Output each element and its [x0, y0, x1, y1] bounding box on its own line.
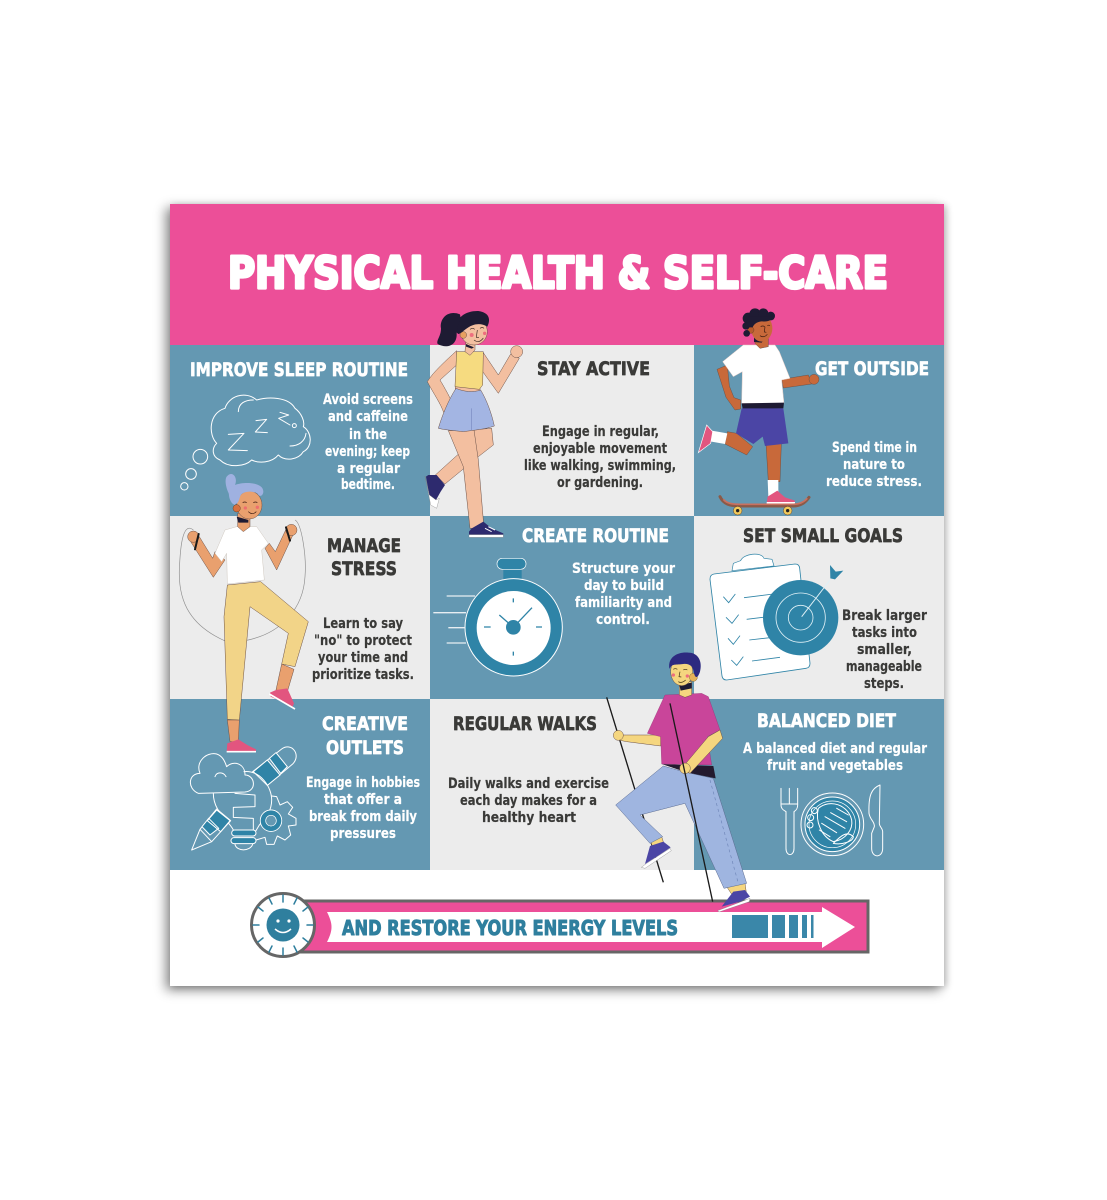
panel: improve sleep routine text: Avoid screens: [323, 392, 413, 408]
panel: create routine text: CREATE ROUTINE: [522, 525, 669, 547]
panel: regular walks text: each day makes for a: [460, 793, 597, 809]
panel: manage stress text: your time and: [318, 650, 408, 666]
panel: creative outlets text: that offer a: [324, 792, 402, 808]
panel: stay active text: STAY ACTIVE: [537, 358, 650, 380]
panel: set small goals text: manageable: [846, 659, 922, 675]
icon: smiling sun: [252, 894, 314, 956]
panel: creative outlets text: CREATIVE: [322, 713, 408, 735]
panel: set small goals text: tasks into: [852, 625, 917, 641]
panel: improve sleep routine text: and caffeine: [328, 409, 408, 425]
panel: regular walks text: Daily walks and exercise: [448, 776, 609, 792]
icon: clipboard and target: [710, 554, 843, 680]
panel: manage stress text: "no" to protect: [314, 633, 412, 649]
panel: get outside text: [815, 358, 929, 490]
panel: manage stress text: MANAGE: [327, 535, 401, 557]
panel: balanced diet text: BALANCED DIET: [757, 710, 896, 732]
panel: get outside text: nature to: [843, 457, 905, 473]
panel: set small goals text: Break larger: [842, 608, 927, 624]
panel: create routine text: control.: [596, 612, 650, 628]
panel: improve sleep routine text: [190, 359, 413, 493]
panel: creative outlets text: [306, 713, 420, 842]
panel: create routine text: day to build: [584, 578, 664, 594]
panel: improve sleep routine text: a regular: [337, 461, 400, 477]
panel: get outside text: reduce stress.: [826, 474, 922, 490]
panel: regular walks text: REGULAR WALKS: [453, 713, 597, 735]
panel: manage stress text: STRESS: [331, 558, 397, 580]
icon: plate and cutlery: [781, 785, 883, 856]
panel: improve sleep routine text: IMPROVE SLEEP ROUTINE: [190, 359, 408, 381]
panel: manage stress text: prioritize tasks.: [312, 667, 414, 683]
panel: get outside text: Spend time in: [832, 440, 917, 456]
panel: set small goals text: smaller,: [857, 642, 912, 658]
panel: balanced diet text: fruit and vegetables: [767, 758, 903, 774]
banner arrow: [327, 907, 855, 948]
panel: create routine text: familiarity and: [575, 595, 672, 611]
panel: balanced diet text: [743, 710, 927, 774]
panel: improve sleep routine text: evening; keep: [325, 444, 410, 460]
progress blocks: [732, 915, 814, 938]
figure: woman with ponytail running: [425, 311, 523, 537]
poster card with shadow: [170, 204, 944, 986]
panel: improve sleep routine text: in the: [349, 427, 387, 443]
panel: create routine text: [522, 525, 675, 628]
panel: set small goals text: SET SMALL GOALS: [743, 525, 903, 547]
panel: creative outlets text: OUTLETS: [326, 737, 404, 759]
panel: stay active text: like walking, swimming,: [524, 458, 676, 474]
panel: stay active text: Engage in regular,: [542, 424, 659, 440]
figure: woman jumping rope: [179, 474, 308, 752]
figure: boy on skateboard: [698, 308, 819, 515]
panel: balanced diet text: A balanced diet and regular: [743, 741, 927, 757]
panel: stay active text: or gardening.: [557, 475, 643, 491]
panel: stay active text: [524, 358, 676, 491]
panel: improve sleep routine text: bedtime.: [341, 477, 395, 493]
icon: sleep thought cloud: [181, 395, 310, 490]
title: PHYSICAL HEALTH & SELF-CARE: [228, 248, 888, 299]
icon: creative brain bulb pencils: [190, 747, 296, 850]
panel: regular walks text: healthy heart: [482, 810, 576, 826]
panel: creative outlets text: pressures: [330, 826, 396, 842]
icon: stopwatch: [433, 558, 562, 676]
figure: man walking with poles: [607, 653, 750, 912]
panel: creative outlets text: break from daily: [309, 809, 417, 825]
panel: get outside text: GET OUTSIDE: [815, 358, 929, 380]
panel: set small goals text: [743, 525, 927, 692]
panel: manage stress text: [312, 535, 414, 683]
panel: create routine text: Structure your: [572, 561, 675, 577]
panel: stay active text: enjoyable movement: [533, 441, 667, 457]
panel: creative outlets text: Engage in hobbies: [306, 775, 420, 791]
panel: regular walks text: [448, 713, 609, 826]
panel: set small goals text: steps.: [864, 676, 904, 692]
panel grid: [170, 345, 944, 870]
header band: [170, 204, 944, 345]
panel: manage stress text: Learn to say: [323, 616, 403, 632]
banner text: AND RESTORE YOUR ENERGY LEVELS: [342, 916, 678, 940]
bottom banner bar: [300, 901, 868, 952]
